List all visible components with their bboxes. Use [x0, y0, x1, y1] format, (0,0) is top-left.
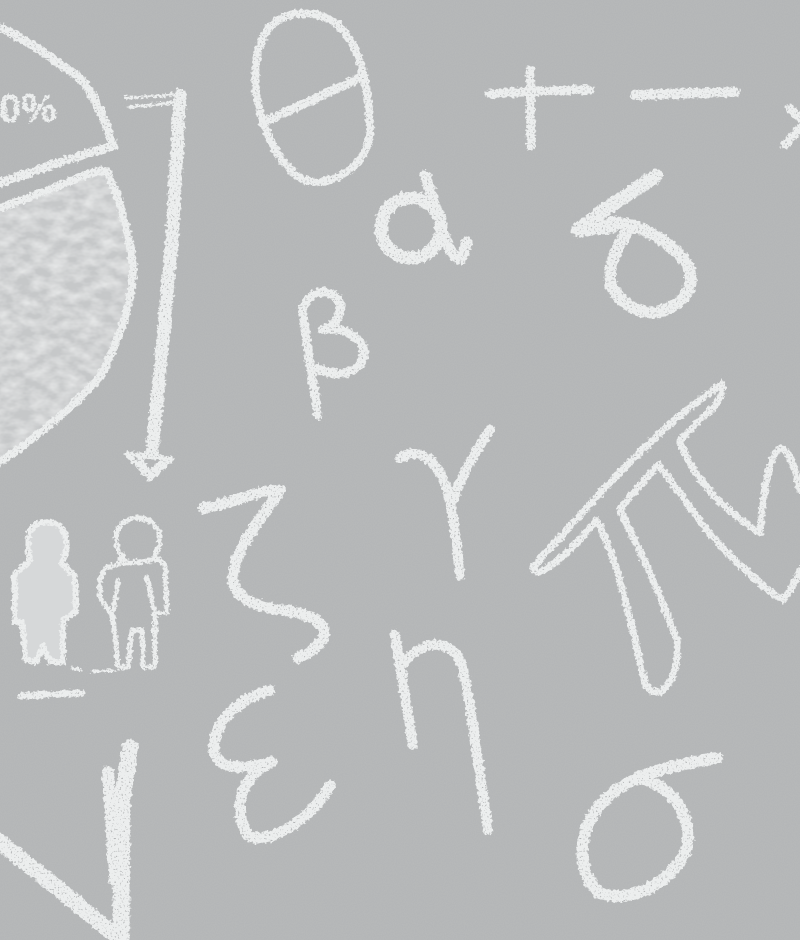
- symbol: delta: [578, 176, 691, 313]
- icon: filled person outline: [14, 522, 76, 662]
- pie chart top slice: [0, 27, 113, 183]
- symbol: beta: [303, 292, 364, 415]
- symbol: eta: [395, 635, 488, 830]
- symbol: epsilon: [214, 690, 330, 838]
- symbol: theta: [255, 13, 370, 182]
- symbol: gamma: [400, 430, 490, 575]
- symbol: pi: [533, 384, 800, 692]
- symbol: partial multiply: [785, 108, 800, 145]
- icon: filled person body: [14, 522, 76, 662]
- ground line under people: [72, 668, 115, 671]
- pie chart shaded slice fill: [0, 171, 133, 460]
- symbol: sigma: [582, 758, 717, 896]
- arrow: [125, 94, 182, 479]
- lower pie chart: [0, 748, 130, 940]
- symbol: alpha: [381, 175, 467, 259]
- symbol: plus: [490, 70, 590, 146]
- symbol: zeta: [204, 490, 324, 658]
- dash: [22, 693, 82, 696]
- icon: outlined person: [100, 518, 167, 667]
- pie chart slice outline: [0, 171, 133, 462]
- symbol: minus: [635, 92, 735, 95]
- pie chart top slice: 0%: [0, 87, 57, 131]
